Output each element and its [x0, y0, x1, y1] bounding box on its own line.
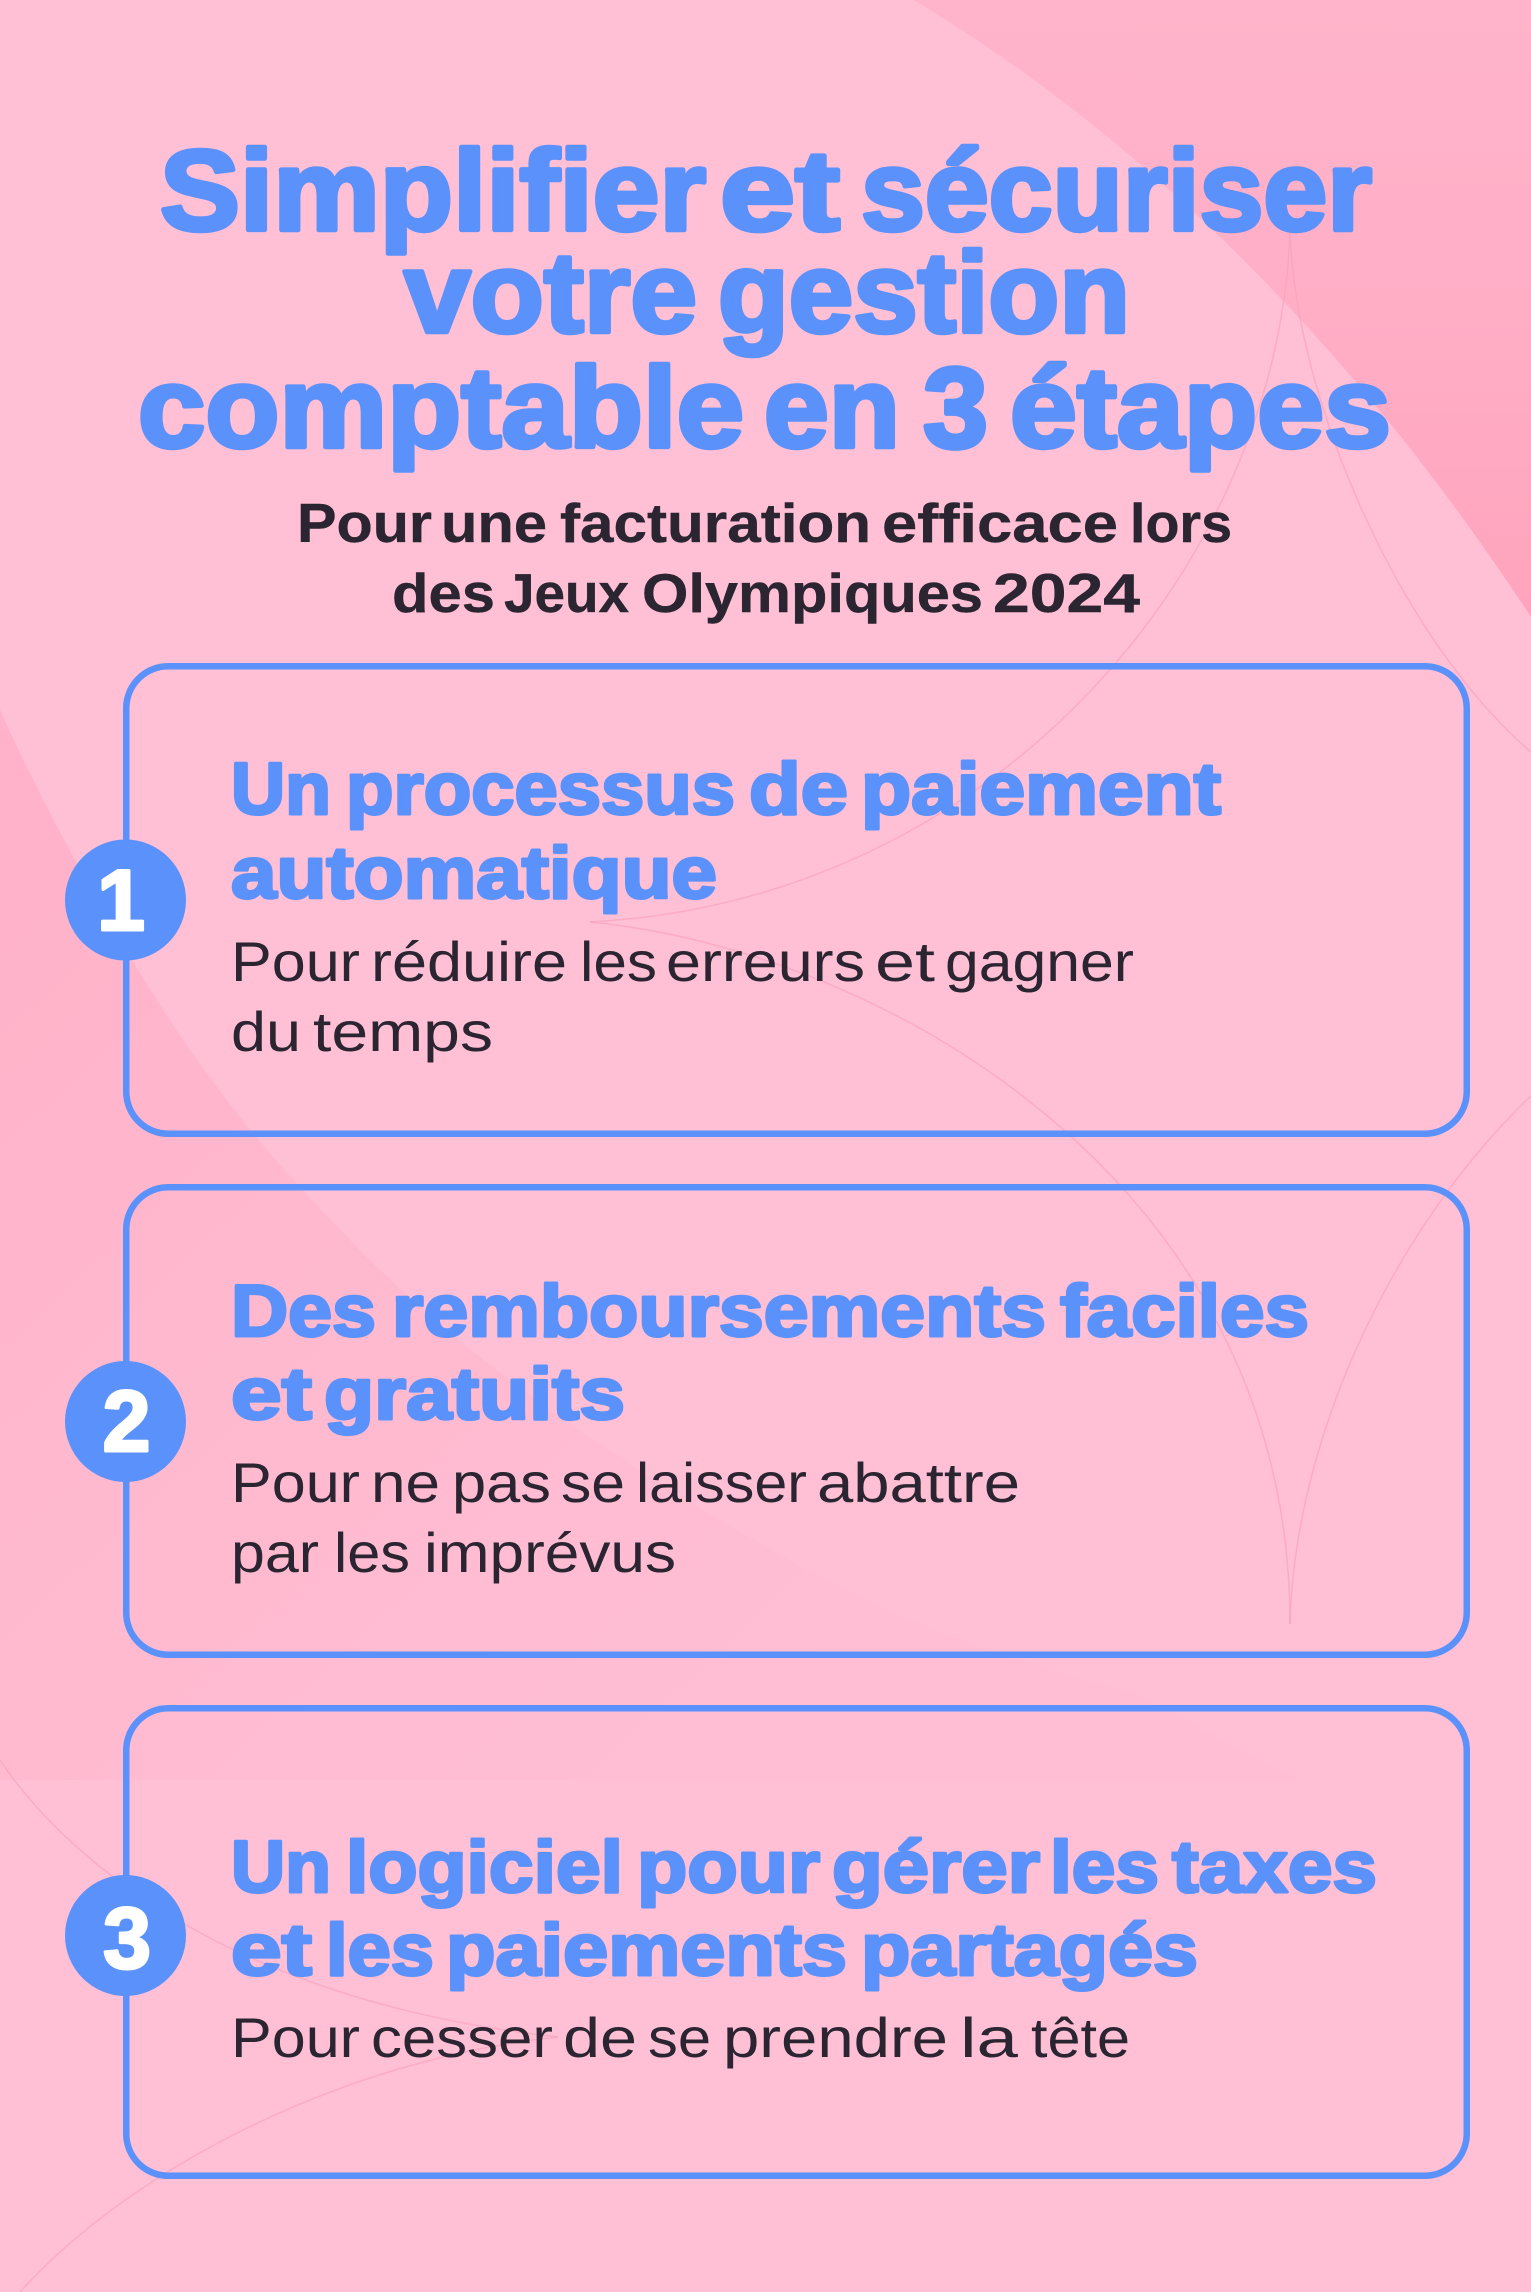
heading: step 3: logiciel [346, 1827, 623, 1908]
subtitle: Pour [297, 492, 432, 554]
heading: step 1: de [749, 749, 848, 830]
text: step 1: les [580, 930, 657, 993]
heading: step 2: et [231, 1354, 312, 1435]
card border 2 [126, 1187, 1467, 1655]
text: step 3: Pour [231, 2006, 360, 2069]
card border 1 [126, 666, 1467, 1134]
badge: number 2 [65, 1361, 186, 1482]
subtitle: une [441, 492, 547, 554]
text: step 3: cesser [371, 2006, 553, 2069]
badge: number 1: 1 [97, 853, 145, 949]
heading: step 3: pour [637, 1827, 820, 1908]
subtitle: des [392, 562, 495, 624]
text: step 2: se [561, 1451, 625, 1514]
heading: step 1 [231, 749, 1221, 914]
text: step 2 [231, 1451, 1020, 1584]
panel: step 3 [65, 1708, 1467, 2176]
badge: number 2: 2 [103, 1374, 150, 1470]
heading: step 3: paiements [446, 1910, 847, 1991]
text: step 2: les [334, 1521, 410, 1584]
text: step 2: pas [452, 1451, 551, 1514]
badge: number 3 [65, 1875, 186, 1996]
heading: step 1: automatique [231, 833, 717, 914]
text: step 3: prendre [723, 2006, 948, 2069]
heading: step 1: paiement [861, 749, 1221, 830]
text: step 2: par [231, 1521, 319, 1584]
subtitle: Olympiques [642, 562, 983, 624]
text: step 2: abattre [817, 1451, 1020, 1514]
text: step 1: du [231, 1000, 301, 1063]
badge: number 3: 3 [103, 1891, 151, 1987]
title: votre [404, 230, 697, 357]
title: comptable [138, 345, 744, 472]
heading: step 3: les [1050, 1827, 1159, 1908]
heading: step 2: faciles [1060, 1271, 1309, 1352]
heading: step 1: Un [231, 749, 331, 830]
heading: step 3: partagés [861, 1910, 1198, 1991]
heading: step 2 [231, 1271, 1309, 1435]
card border 3 [126, 1708, 1467, 2176]
heading: step 3: taxes [1172, 1827, 1377, 1908]
title: étapes [1010, 345, 1391, 472]
text: step 2: Pour [231, 1451, 360, 1514]
subtitle [297, 492, 1232, 624]
title: en [764, 345, 900, 472]
text: step 1: Pour [231, 930, 360, 993]
subtitle: 2024 [993, 562, 1140, 624]
panel: step 2 [65, 1187, 1467, 1655]
text: step 3: la [960, 2006, 1019, 2069]
text: step 1: réduire [371, 930, 567, 993]
title: 3 [923, 345, 988, 472]
heading: step 2: remboursements [392, 1271, 1046, 1352]
text: step 1 [231, 930, 1134, 1063]
title: sécuriser [861, 128, 1372, 255]
background shape: left [0, 710, 1300, 1780]
badge: number 1 [65, 840, 186, 960]
subtitle: efficace [882, 492, 1118, 554]
heading: step 3: Un [231, 1827, 331, 1908]
title [138, 128, 1391, 472]
background shape: top right [914, 0, 1531, 617]
heading: step 3: gérer [832, 1827, 1040, 1908]
heading: step 2: gratuits [324, 1354, 625, 1435]
text: step 1: et [875, 930, 936, 993]
text: step 2: ne [371, 1451, 440, 1514]
text: step 3: de [563, 2006, 637, 2069]
text: step 2: laisser [636, 1451, 807, 1514]
heading: step 2: Des [231, 1271, 376, 1352]
heading: step 3 [231, 1827, 1377, 1991]
text: step 2: imprévus [424, 1521, 676, 1584]
title: gestion [718, 230, 1130, 357]
text: step 3: tête [1031, 2006, 1130, 2069]
heading: step 1: processus [346, 749, 735, 830]
text: step 3 [231, 2006, 1130, 2069]
subtitle: facturation [560, 492, 871, 554]
heading: step 3: et [231, 1910, 312, 1991]
subtitle: lors [1130, 492, 1232, 554]
panel: step 1 [65, 666, 1467, 1134]
text: step 1: temps [313, 1000, 493, 1063]
text: step 1: erreurs [666, 930, 865, 993]
heading: step 3: les [326, 1910, 434, 1991]
text: step 3: se [648, 2006, 711, 2069]
title: Simplifier [160, 128, 706, 255]
title: et [720, 128, 840, 255]
subtitle: Jeux [504, 562, 629, 624]
text: step 1: gagner [945, 930, 1134, 993]
